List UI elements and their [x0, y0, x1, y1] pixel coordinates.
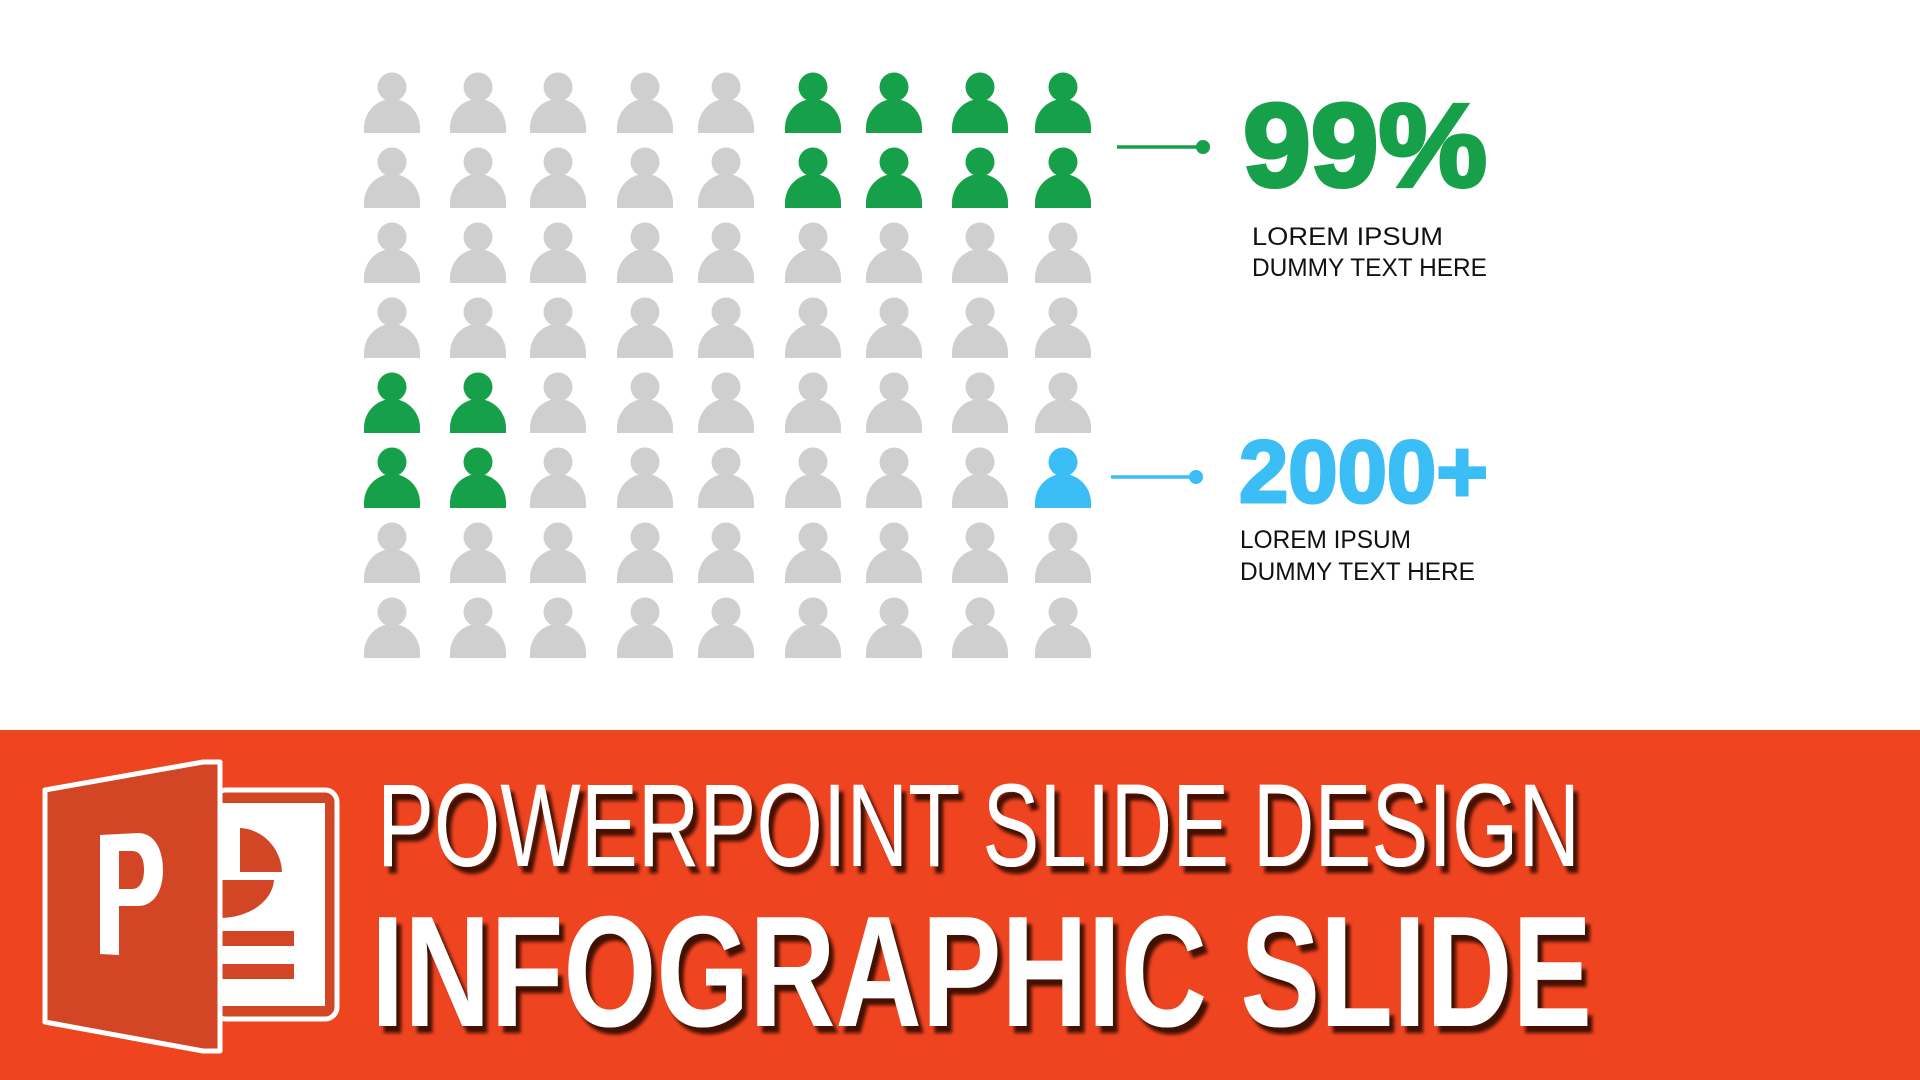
icon: powerpoint logo [45, 762, 337, 1051]
stat: 99%: 99% [1243, 80, 1487, 212]
connector: green line [1117, 140, 1210, 154]
text: 99% caption: LOREM IPSUM [1252, 223, 1443, 251]
people grid chart [364, 72, 1091, 658]
banner [0, 730, 1920, 1080]
stat: 2000+: 2000+ [1239, 422, 1488, 521]
text: 2000+ caption [1240, 526, 1475, 586]
text: 2000+ caption: LOREM IPSUM [1240, 526, 1411, 554]
connector: blue line [1111, 470, 1203, 484]
text: 99% caption [1252, 223, 1487, 282]
text: 99% caption: DUMMY TEXT HERE [1252, 254, 1487, 282]
text: 2000+ caption: DUMMY TEXT HERE [1240, 558, 1475, 586]
